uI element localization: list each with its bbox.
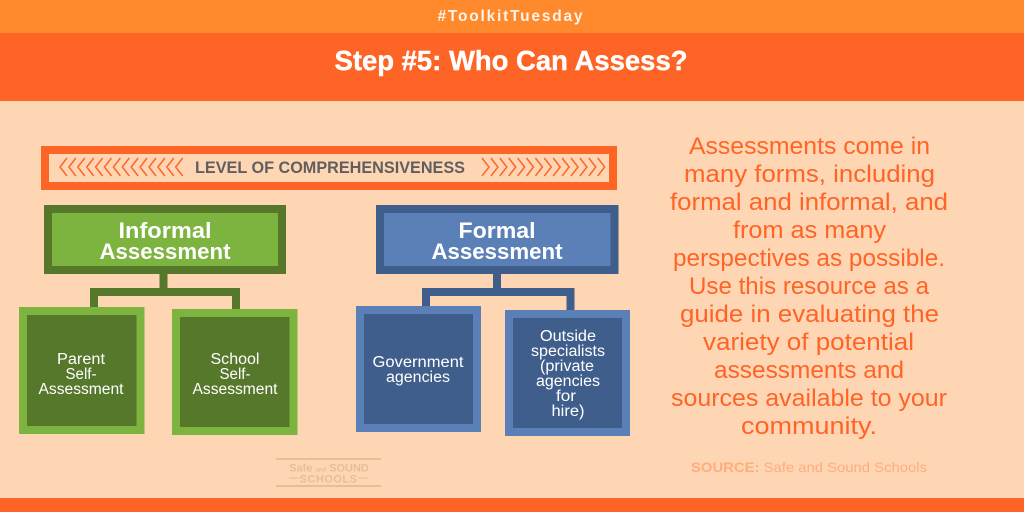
outside specialists box: agencies: [536, 373, 600, 390]
informal heading box: Informal: [118, 218, 212, 243]
government agencies box: agencies: [386, 369, 450, 386]
description paragraph: variety of potential: [703, 329, 914, 356]
description paragraph: Assessments come in: [689, 133, 930, 160]
school self-assessment box: Assessment: [192, 381, 278, 398]
government agencies box: Government: [372, 354, 464, 371]
informal heading box: Assessment: [100, 239, 231, 264]
source credit: SOURCE: Safe and Sound Schools: [691, 459, 927, 475]
logo: safe and sound schools: [276, 458, 381, 487]
parent self-assessment box: Parent: [57, 351, 106, 368]
formal assessment tree: [360, 209, 626, 432]
outside specialists box: [509, 314, 626, 432]
informal assessment tree: [23, 209, 294, 431]
description paragraph: guide in evaluating the: [680, 301, 939, 328]
outside specialists box: specialists: [531, 343, 605, 360]
description paragraph: formal and informal, and: [670, 189, 948, 216]
comprehensiveness bar: [45, 150, 613, 186]
bar label: LEVEL OF COMPREHENSIVENESS: [195, 159, 465, 177]
footer band: [0, 498, 1024, 512]
connector: formal: [426, 274, 570, 314]
hashtag banner: [0, 0, 1024, 33]
hashtag banner: #ToolkitTuesday: [438, 8, 583, 25]
description paragraph: assessments and: [714, 357, 904, 384]
logo: safe and sound schools: Safe and SOUND: [289, 462, 369, 474]
right chevrons: [482, 158, 605, 176]
description paragraph: community.: [741, 413, 877, 440]
parent self-assessment box: Assessment: [38, 381, 124, 398]
left chevrons: [60, 158, 183, 176]
parent self-assessment box: [23, 311, 140, 430]
description paragraph: Use this resource as a: [689, 273, 930, 300]
description paragraph: [670, 133, 948, 440]
title band: Step #5: Who Can Assess?: [334, 45, 688, 76]
outside specialists box: for: [556, 388, 576, 405]
school self-assessment box: School: [210, 351, 260, 368]
description paragraph: from as many: [733, 217, 886, 244]
outside specialists box: Outside: [540, 328, 596, 345]
school self-assessment box: Self-: [220, 366, 250, 383]
formal heading box: [380, 209, 614, 270]
outside specialists box: hire): [552, 403, 584, 420]
government agencies box: [360, 310, 477, 428]
description paragraph: sources available to your: [671, 385, 947, 412]
informal heading box: [48, 209, 282, 270]
logo: safe and sound schools: SCHOOLS: [300, 474, 357, 486]
formal heading box: Formal: [458, 218, 536, 243]
description paragraph: perspectives as possible.: [673, 245, 945, 272]
formal heading box: Assessment: [432, 239, 563, 264]
description paragraph: many forms, including: [684, 161, 935, 188]
outside specialists box: (private: [540, 358, 594, 375]
connector: informal: [94, 274, 236, 310]
parent self-assessment box: Self-: [66, 366, 96, 383]
school self-assessment box: [176, 313, 294, 431]
title band: [0, 33, 1024, 101]
